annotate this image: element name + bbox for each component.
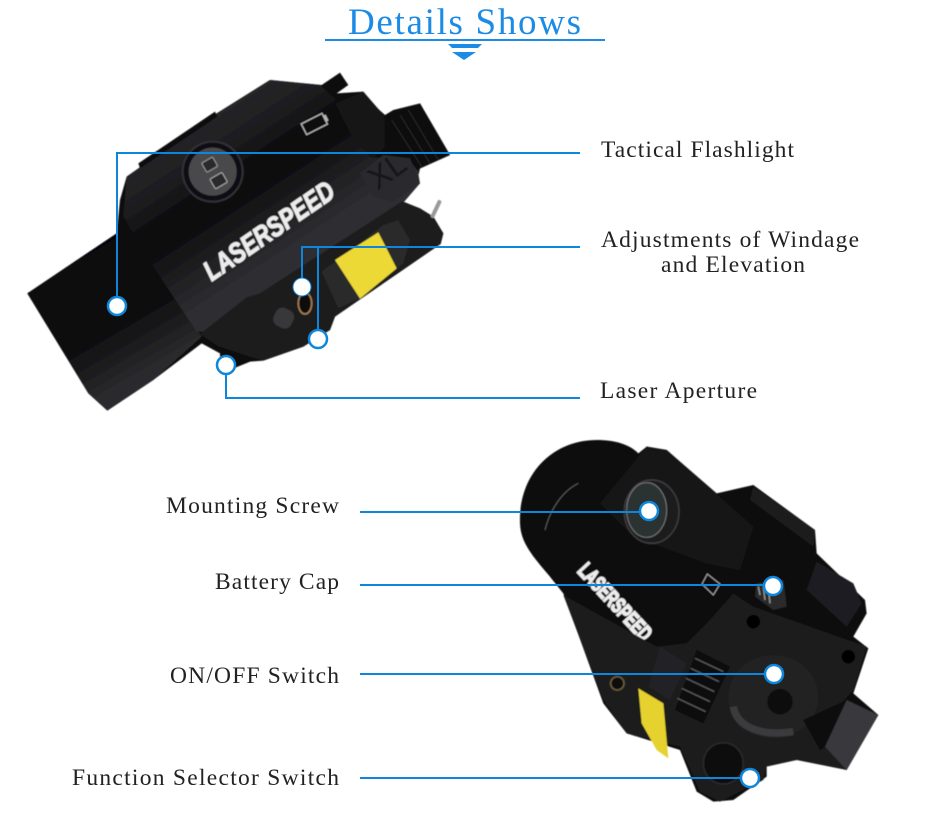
lens edge highlight bbox=[545, 483, 578, 530]
silhouette bbox=[520, 440, 878, 802]
callout: Laser Aperture: Laser Aperture bbox=[600, 378, 757, 404]
serrated lever bbox=[825, 700, 878, 770]
oval recess bbox=[271, 305, 296, 331]
callout: Adjustments of Windage and Elevation: Adjustments of Windage bbox=[601, 227, 859, 253]
small wheel bbox=[755, 580, 787, 610]
rear dial bbox=[728, 655, 818, 738]
body bbox=[123, 80, 420, 332]
function switch knob bbox=[703, 743, 743, 784]
photo: flashlight side view bbox=[27, 73, 450, 411]
warning label dark bbox=[322, 220, 410, 308]
screw bbox=[624, 480, 679, 543]
title underline and arrow bbox=[325, 39, 605, 60]
callout: Tactical Flashlight bbox=[108, 137, 794, 315]
logo: LASERSPEED bbox=[198, 175, 340, 287]
rear rail bbox=[750, 487, 815, 547]
holes bbox=[747, 615, 760, 628]
knurled wheel bbox=[675, 650, 730, 723]
XL tab bbox=[648, 647, 687, 700]
callout: Function Selector Switch: Function Selector Switch bbox=[72, 765, 339, 791]
mounting screw bbox=[183, 142, 243, 202]
battery icon bbox=[702, 574, 720, 595]
callout: Adjustments of Windage and Elevation: and Elevation bbox=[661, 252, 805, 278]
laser module bbox=[563, 593, 867, 802]
photo: flashlight rear view bbox=[520, 440, 878, 802]
side rail bbox=[138, 112, 217, 168]
pin bbox=[433, 202, 439, 216]
title: Details Shows bbox=[348, 2, 581, 43]
warning label yellow bbox=[335, 232, 397, 299]
rear block bbox=[335, 92, 385, 158]
battery icon bbox=[301, 112, 329, 135]
callout: Tactical Flashlight: Tactical Flashlight bbox=[601, 137, 794, 163]
knurled wheel bbox=[385, 103, 450, 170]
logo: LASERSPEED bbox=[573, 558, 657, 646]
laser module bbox=[200, 202, 443, 361]
barrel bbox=[27, 233, 202, 411]
photo: flashlight side view: XL bbox=[361, 145, 413, 196]
callout: Battery Cap bbox=[215, 569, 782, 595]
switch bbox=[611, 677, 624, 690]
callout: Adjustments of Windage and Elevation bbox=[293, 227, 859, 348]
callout: Battery Cap: Battery Cap bbox=[215, 569, 339, 595]
callout: Function Selector Switch bbox=[72, 765, 759, 791]
silhouette bbox=[27, 73, 450, 411]
callout: Laser Aperture bbox=[217, 356, 757, 404]
body panel bbox=[550, 447, 753, 652]
switch bbox=[298, 293, 312, 314]
callout: Mounting Screw: Mounting Screw bbox=[166, 493, 339, 519]
callout: ON/OFF Switch bbox=[170, 663, 783, 689]
callout: ON/OFF Switch: ON/OFF Switch bbox=[170, 663, 339, 689]
warning label yellow bbox=[638, 688, 668, 758]
XL tab bbox=[360, 155, 420, 202]
callout: Mounting Screw bbox=[166, 493, 658, 520]
